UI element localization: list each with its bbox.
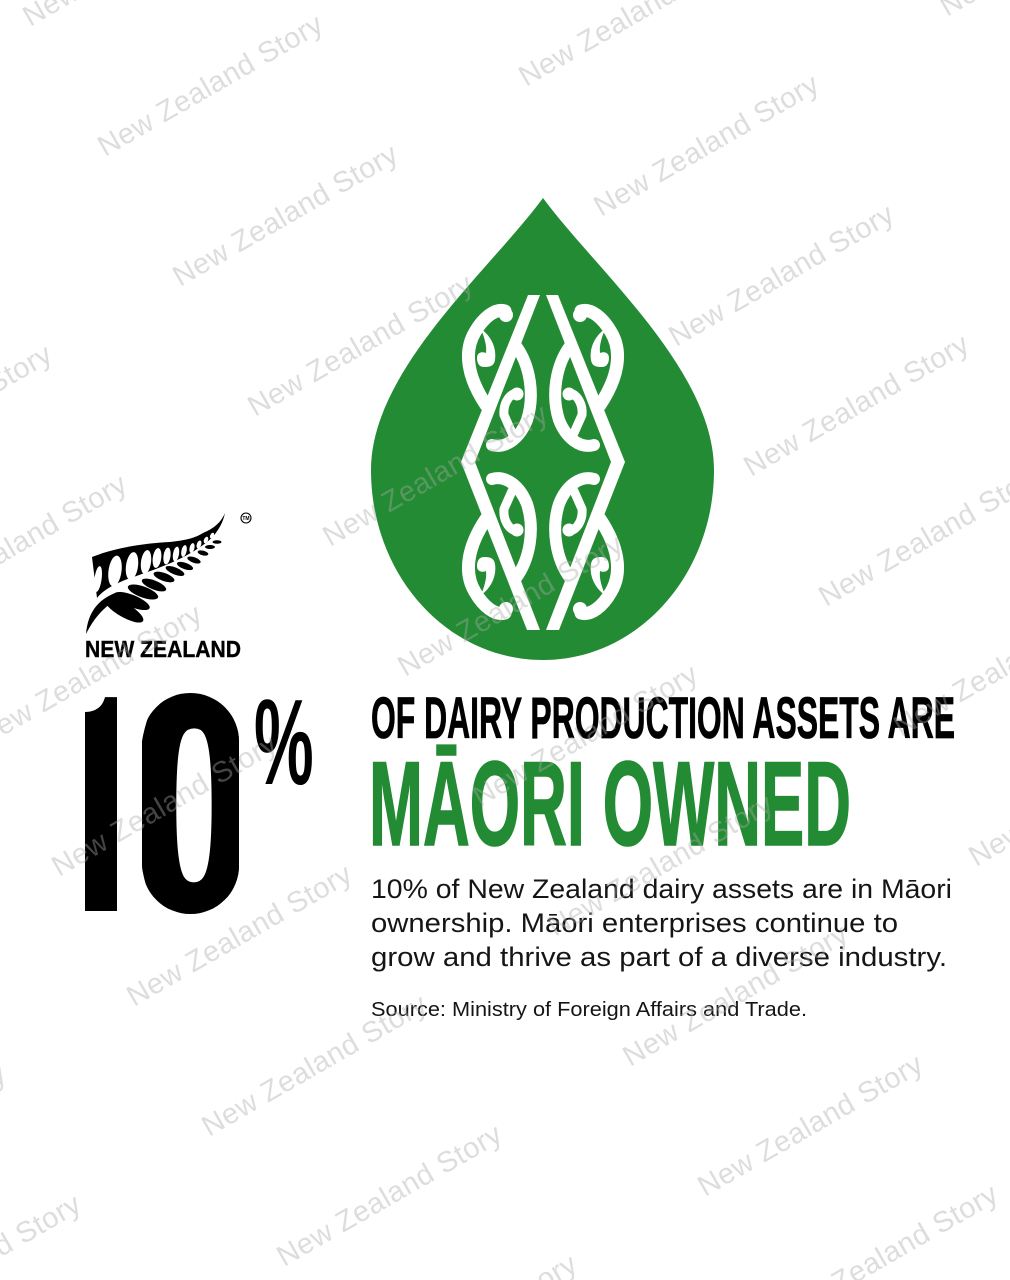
watermarks: New Zealand Story <box>618 918 854 1073</box>
watermarks: New Zealand Story <box>392 528 629 683</box>
watermarks: New Zealand Story <box>692 1048 929 1203</box>
big statistic: 10%: 1 <box>14 634 181 976</box>
trademark mark: TM <box>242 516 250 522</box>
watermarks: New Zealand Story <box>664 198 900 353</box>
logo wordmark: NEW ZEALAND <box>85 636 241 662</box>
watermarks: New Zealand Story <box>122 858 358 1013</box>
watermarks: New Zealand Story <box>738 328 975 483</box>
body text <box>371 874 952 972</box>
icon: silver fern <box>86 513 225 634</box>
watermarks: New Zealand Story <box>318 398 554 553</box>
body text: grow and thrive as part of a diverse industry. <box>371 942 947 972</box>
watermarks: New Zealand Story <box>468 658 704 813</box>
trademark mark <box>241 513 251 523</box>
watermarks: New Zealand Story <box>542 788 779 943</box>
body text: 10% of New Zealand dairy assets are in Māori <box>371 874 952 904</box>
watermarks: New Zealand Story <box>196 988 433 1143</box>
watermarks: New Zealand Story <box>242 268 479 423</box>
big statistic: 10%: % <box>254 674 314 810</box>
big statistic: 10% <box>85 693 312 914</box>
watermarks: New Zealand Story <box>588 68 825 223</box>
watermarks: New Zealand Story <box>46 728 283 883</box>
watermarks: New Zealand Story <box>168 138 404 293</box>
logo: New Zealand fern <box>85 513 251 662</box>
body text: ownership. Māori enterprises continue to <box>371 908 898 938</box>
watermarks: New Zealand Story <box>92 8 329 163</box>
source note: Source: Ministry of Foreign Affairs and Trade. <box>371 999 807 1021</box>
water drop <box>371 198 714 660</box>
big statistic: 10%: 0 <box>133 615 255 995</box>
icon: maori koru pattern <box>461 295 625 630</box>
watermarks: New Zealand Story <box>272 1118 508 1273</box>
